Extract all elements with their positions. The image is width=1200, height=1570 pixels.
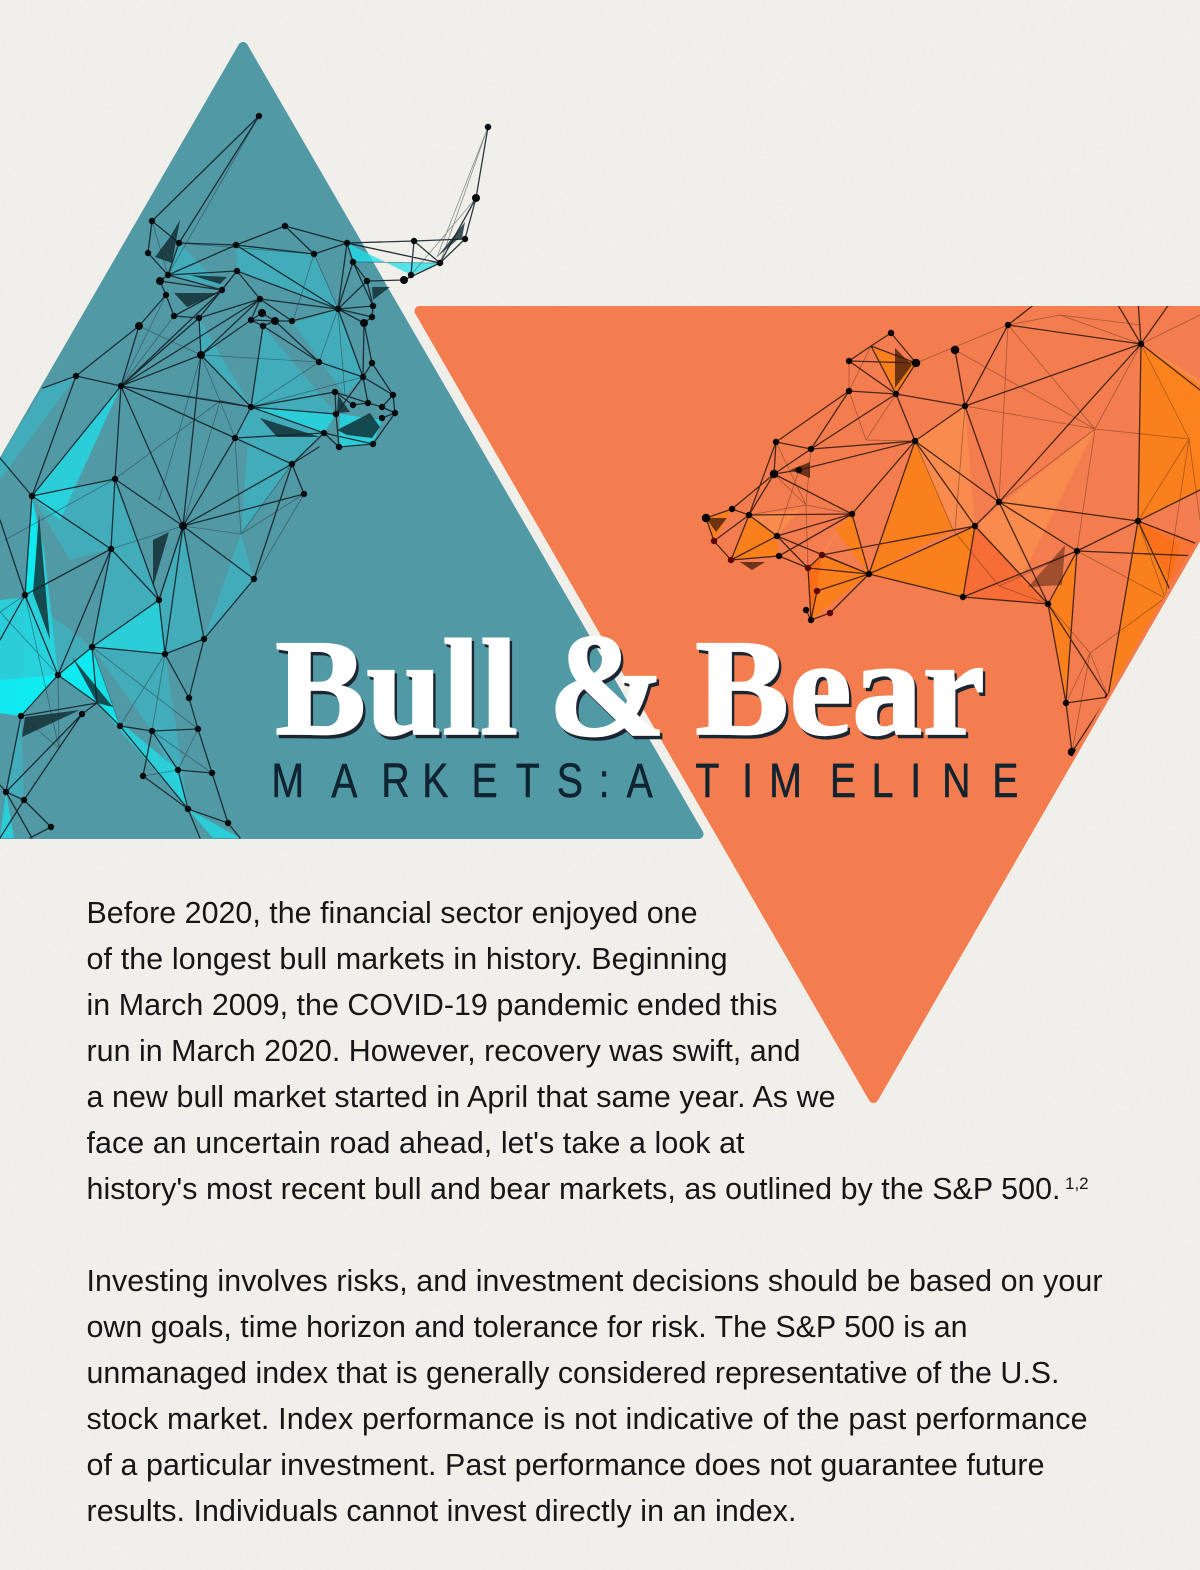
intro paragraph: of the longest bull markets in history. Beginning [86,942,728,976]
disclaimer paragraph [86,1264,1102,1528]
bear large joint dots [706,350,1072,752]
title [275,604,985,768]
bull bright facets [0,243,440,838]
teal triangle panel [0,47,698,834]
bear wireframe illustration [706,300,1200,752]
bear main mesh lines [706,300,1200,752]
intro paragraph: run in March 2020. However, recovery was swift, and [86,1034,800,1068]
bull main mesh lines [0,116,488,838]
disclaimer paragraph: own goals, time horizon and tolerance for risk. The S&P 500 is an [86,1310,968,1344]
orange triangle panel [420,311,1200,1098]
subtitle: MARKETS:A TIMELINE [271,754,1018,808]
intro paragraph [86,896,1089,1206]
bear soft facets [752,348,1200,575]
intro paragraph: face an uncertain road ahead, let's take a look at [86,1126,745,1160]
intro paragraph: 1,2 [1065,1174,1089,1193]
bear joint dots [732,325,1141,703]
bear orange facets [706,344,1200,703]
intro paragraph: Before 2020, the financial sector enjoyed one [86,896,698,930]
disclaimer paragraph: Investing involves risks, and investment decisions should be based on your [86,1264,1102,1298]
intro paragraph: history's most recent bull and bear markets, as outlined by the S&P 500. [86,1172,1060,1206]
intro paragraph: a new bull market started in April that same year. As we [86,1080,836,1114]
disclaimer paragraph: of a particular investment. Past performance does not guarantee future [86,1448,1044,1482]
bull glowing facet [0,496,120,726]
bear dark shards [706,348,912,570]
bear faded shard [1028,545,1065,587]
disclaimer paragraph: stock market. Index performance is not indicative of the past performance [86,1402,1088,1436]
bear thin mesh lines [749,315,1200,752]
bull dark shards [22,220,465,737]
bull large joint dots [139,198,476,526]
bull joint dots [6,116,488,827]
bull thin mesh lines [0,116,488,776]
title: Bear [695,611,985,764]
bull wireframe illustration [0,116,488,838]
intro paragraph: in March 2009, the COVID-19 pandemic ended this [86,988,778,1022]
disclaimer paragraph: unmanaged index that is generally considered representative of the U.S. [86,1356,1060,1390]
bear red-orange facets [808,521,1200,620]
title: & [548,604,666,768]
title: Bull [275,611,518,764]
bull soft facets [0,243,363,809]
disclaimer paragraph: results. Individuals cannot invest directly in an index. [86,1494,796,1528]
bear red joint dots [714,541,1108,697]
